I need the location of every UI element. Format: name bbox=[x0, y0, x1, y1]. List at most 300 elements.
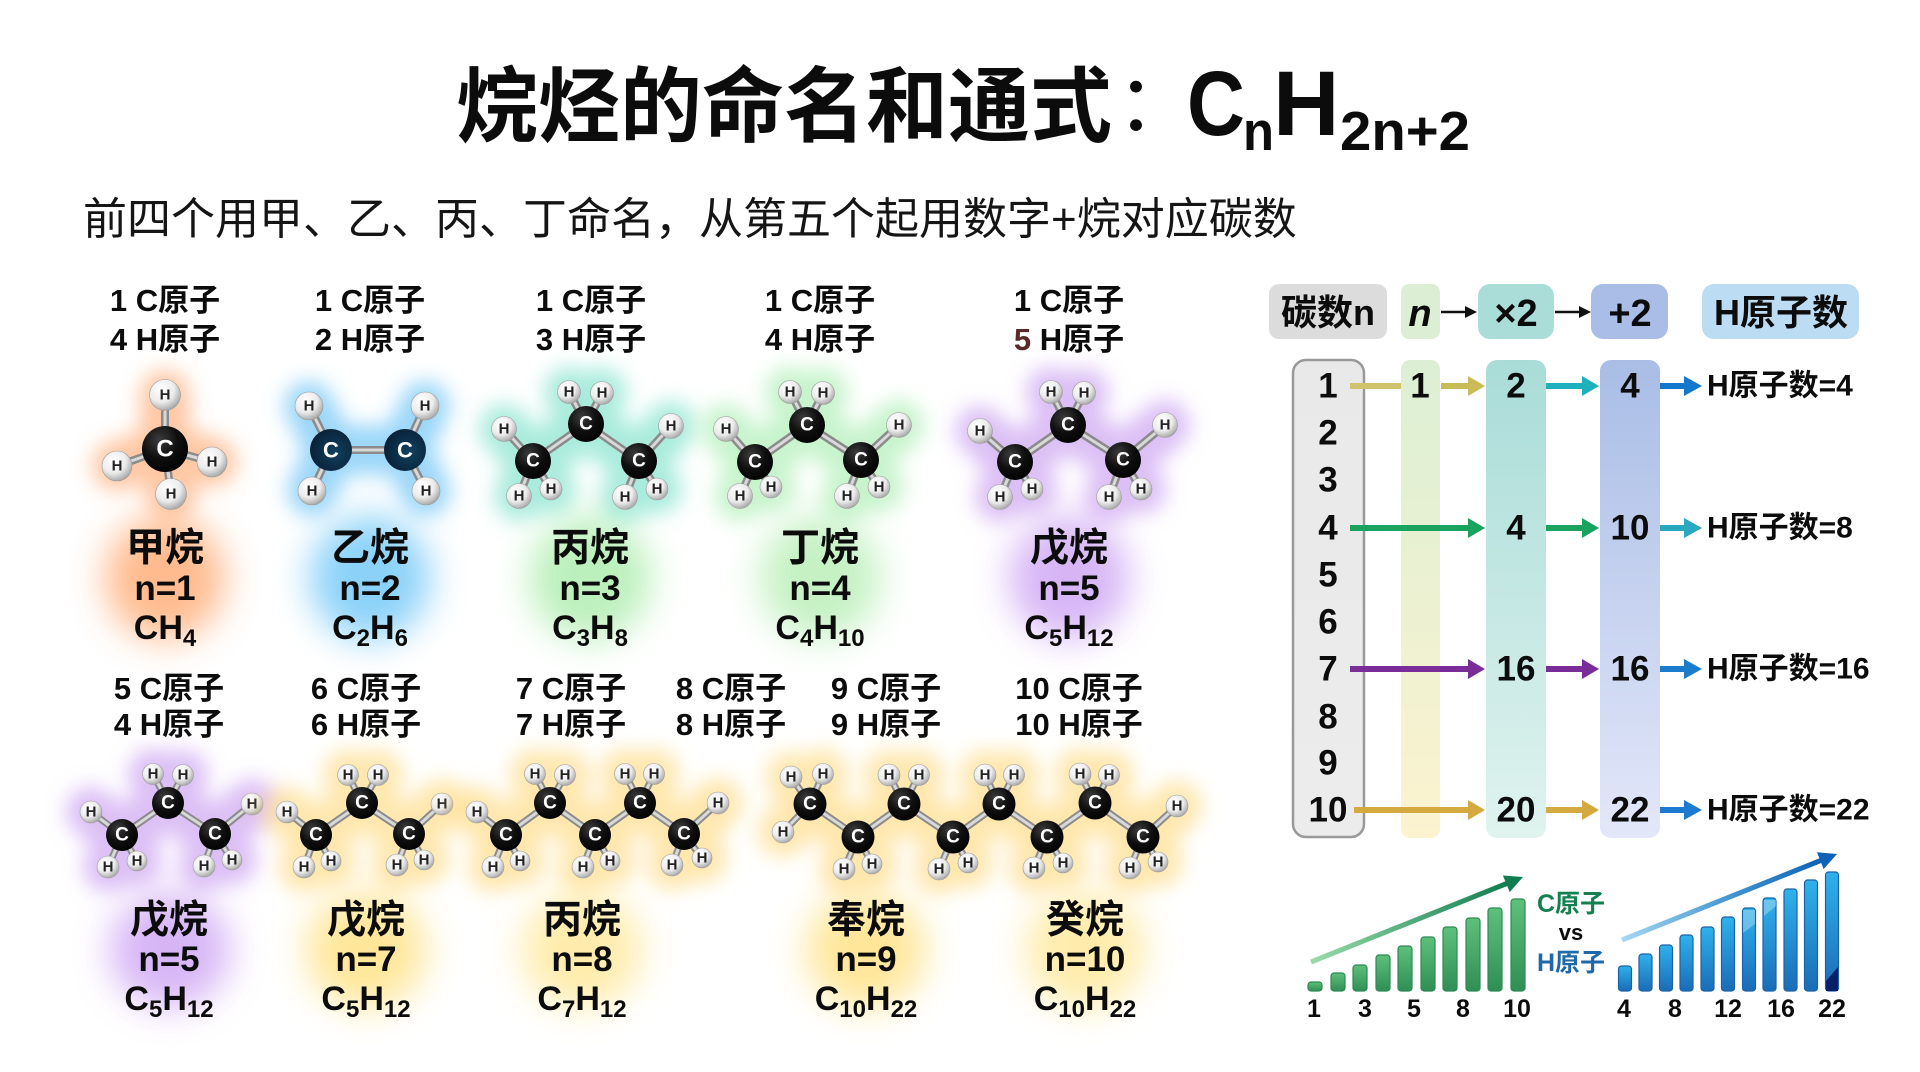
name and formula: n=7 bbox=[321, 899, 411, 1023]
molecule: 戊烷 n=5: H bbox=[975, 422, 985, 440]
molecule: 丙烷 n=3: H bbox=[499, 420, 509, 438]
axis labels: C: 8 bbox=[1456, 995, 1470, 1023]
molecule: 乙烷 bbox=[295, 392, 440, 505]
legend: C vs H: C原子 bbox=[1537, 890, 1605, 918]
name and formula: 丙烷 n=3: n=3 bbox=[559, 569, 621, 608]
name and formula: 戊烷 n=5: n=5 bbox=[1038, 569, 1100, 608]
panel: 戊烷 (n=5) bbox=[968, 283, 1178, 652]
name and formula: 丙烷 n=3: C bbox=[552, 609, 577, 647]
molecule: 丁烷: H bbox=[721, 420, 731, 438]
name and formula: row 2 n=5 bbox=[124, 899, 214, 1023]
atom counts: 丁烷: 1 C原子 bbox=[765, 283, 875, 318]
atom counts: 丁烷 bbox=[765, 283, 875, 357]
molecule: n=7: H bbox=[419, 852, 429, 868]
name and formula: row 2 n=5: n=5 bbox=[138, 940, 200, 979]
molecule: 乙烷: H bbox=[420, 398, 430, 414]
atom counts: n=10 bbox=[1015, 671, 1143, 742]
molecule: n=7: C bbox=[355, 792, 369, 814]
panel: 乙烷 bbox=[295, 283, 440, 652]
molecule: long chain: H bbox=[1075, 766, 1085, 782]
molecule: n=8: H bbox=[560, 766, 570, 784]
name and formula: 丙烷 n=3: 8 bbox=[615, 625, 628, 652]
molecule: n=8: C bbox=[499, 824, 513, 846]
atom counts: 丙烷 n=3: 1 C原子 bbox=[536, 283, 646, 318]
panel: 丙烷 (n=8) bbox=[466, 671, 786, 1023]
name and formula: 乙烷: n=2 bbox=[339, 569, 401, 608]
name and formula: 丙烷 n=3: 3 bbox=[577, 625, 590, 652]
molecule: 戊烷 n=5: H bbox=[1027, 480, 1037, 498]
molecule: long chain: H bbox=[1153, 854, 1163, 870]
legend: C vs H bbox=[1537, 890, 1605, 977]
bar corner bbox=[1826, 967, 1838, 991]
column values: +2: 22 bbox=[1611, 790, 1649, 830]
column values: ×2: 4 bbox=[1506, 508, 1526, 548]
molecule: long chain: C bbox=[851, 826, 865, 848]
molecule: row 2 n=5: H bbox=[247, 796, 257, 812]
molecule: n=7: H bbox=[437, 796, 447, 812]
name and formula: n=8: 12 bbox=[600, 996, 627, 1023]
molecule: 戊烷 n=5: H bbox=[1046, 384, 1056, 400]
panel: 奉烷 and 癸烷 bbox=[772, 671, 1188, 1023]
header: +2 bbox=[1591, 284, 1668, 339]
molecule: long chain: H bbox=[1104, 766, 1114, 784]
molecule: long chain: C bbox=[992, 794, 1006, 814]
name and formula: 甲烷: 甲烷 bbox=[126, 527, 204, 570]
molecule: 丙烷 n=3: H bbox=[666, 418, 676, 434]
atom counts: 甲烷: 4 H原子 bbox=[110, 322, 220, 357]
header: n: n bbox=[1408, 293, 1432, 335]
molecule: 丙烷 n=3: C bbox=[632, 450, 646, 472]
molecule: 丁烷: C bbox=[800, 414, 814, 436]
name and formula: 戊烷 n=5: 戊烷 bbox=[1030, 527, 1108, 570]
atom counts: 丙烷 n=3: 3 H原子 bbox=[536, 322, 646, 357]
name and formula: 癸烷: 10 bbox=[1058, 996, 1085, 1023]
molecule: long chain: H bbox=[1009, 766, 1019, 784]
molecule: n=7: H bbox=[373, 766, 383, 784]
molecule: row 2 n=5: C bbox=[161, 792, 175, 814]
name and formula: 癸烷: 癸烷 bbox=[1046, 899, 1124, 942]
name and formula: 甲烷: 4 bbox=[183, 625, 197, 652]
molecule: 丙烷 n=3: H bbox=[514, 488, 524, 504]
arrow row: n=10 bbox=[1354, 800, 1702, 820]
panel: 戊烷 (row 2, n=5) bbox=[80, 671, 263, 1023]
name and formula: 丁烷 bbox=[775, 527, 865, 652]
molecule: n=7: C bbox=[402, 824, 416, 844]
column: 碳数: 10 bbox=[1309, 790, 1347, 830]
molecule: 丁烷 bbox=[714, 380, 912, 508]
axis labels: H: 22 bbox=[1818, 995, 1846, 1023]
name and formula: 戊烷 n=5: 12 bbox=[1087, 625, 1114, 652]
name and formula: 乙烷 bbox=[331, 527, 409, 652]
header: H原子数: H原子数 bbox=[1714, 292, 1848, 333]
molecule: long chain: C bbox=[897, 794, 911, 814]
molecule: 丁烷: H bbox=[766, 478, 776, 496]
name and formula: 癸烷: 22 bbox=[1110, 996, 1136, 1023]
column: 碳数: 2 bbox=[1318, 414, 1338, 452]
name and formula: 癸烷: C bbox=[1034, 980, 1058, 1018]
molecule: long chain: C bbox=[1040, 826, 1054, 848]
column values: +2: 16 bbox=[1611, 650, 1649, 688]
subtitle: 前四个用甲、乙、丙、丁命名，从第五个起用数字+烷对应碳数 bbox=[83, 195, 1297, 244]
molecule: 丙烷 n=3: C bbox=[526, 450, 540, 472]
bar chart: C原子 bbox=[1307, 876, 1531, 1023]
molecule: n=7: H bbox=[282, 804, 292, 820]
molecule: long chain: H bbox=[1058, 854, 1068, 872]
header: 碳数n: 碳数n bbox=[1281, 292, 1375, 333]
molecule: long chain: H bbox=[818, 766, 828, 782]
results: H原子数: H原子数=16 bbox=[1707, 652, 1870, 686]
panel: 丁烷 bbox=[714, 283, 912, 652]
molecule: long chain: H bbox=[786, 768, 796, 786]
name and formula: 奉烷: 奉烷 bbox=[827, 899, 905, 942]
atom counts: n=9: 9 H原子 bbox=[831, 707, 941, 742]
molecule: n=7 bbox=[276, 764, 453, 878]
title: H bbox=[1273, 53, 1339, 155]
title: n bbox=[1243, 100, 1274, 162]
title: 2n+2 bbox=[1340, 100, 1470, 162]
column: 碳数: 5 bbox=[1318, 556, 1338, 594]
name and formula: 乙烷: 2 bbox=[357, 625, 370, 652]
name and formula: 癸烷 bbox=[1034, 899, 1136, 1023]
atom counts: n=9: 9 C原子 bbox=[831, 671, 941, 706]
column values: +2: 4 bbox=[1620, 366, 1640, 406]
molecule: long chain: H bbox=[884, 766, 894, 784]
axis labels: H bbox=[1617, 995, 1846, 1023]
molecule: 丙烷 n=3: H bbox=[597, 384, 607, 402]
molecule: long chain: H bbox=[1172, 798, 1182, 814]
molecule: 戊烷 n=5: H bbox=[1079, 384, 1089, 402]
molecule: 乙烷: H bbox=[304, 398, 314, 414]
column values: ×2: 20 bbox=[1497, 790, 1535, 830]
molecule: 丙烷 n=3: H bbox=[546, 480, 556, 498]
column: ×2 bbox=[1486, 360, 1546, 838]
molecule: n=8: C bbox=[588, 824, 602, 846]
molecule: long chain: H bbox=[839, 860, 849, 878]
axis labels: C bbox=[1307, 995, 1531, 1023]
molecule: 戊烷 n=5: H bbox=[1160, 416, 1170, 434]
column values: +2 bbox=[1611, 366, 1649, 830]
results: H原子数 bbox=[1707, 370, 1870, 826]
molecule: row 2 n=5 bbox=[80, 764, 263, 878]
atom counts: n=7/8 headers: 8 H原子 bbox=[676, 707, 786, 742]
name and formula: n=8 bbox=[537, 899, 627, 1023]
name and formula: 丁烷: 10 bbox=[838, 625, 865, 652]
molecule: n=8: C bbox=[543, 792, 557, 814]
bar chart: H原子 bbox=[1617, 852, 1846, 1023]
name and formula: 甲烷: n=1 bbox=[134, 569, 196, 608]
legend: C vs H: H原子 bbox=[1537, 949, 1605, 977]
arrow row: n=7 bbox=[1350, 659, 1702, 679]
atom counts: row 2 n=5 bbox=[114, 671, 224, 742]
molecule: row 2 n=5: H bbox=[178, 766, 188, 784]
name and formula: 癸烷: H bbox=[1085, 980, 1110, 1018]
molecule: n=8: H bbox=[515, 852, 525, 870]
name and formula: 乙烷: 6 bbox=[395, 625, 408, 652]
arrow: n to ×2 bbox=[1441, 306, 1477, 318]
name and formula: 戊烷 n=5: 5 bbox=[1049, 625, 1062, 652]
name and formula: n=7: 12 bbox=[384, 996, 411, 1023]
atom counts: 戊烷 n=5: 1 C原子 bbox=[1014, 283, 1124, 318]
atom counts: n=7/8 headers bbox=[516, 671, 786, 742]
name and formula: n=7: n=7 bbox=[335, 940, 397, 979]
title: 烷烃的命名和通式 bbox=[456, 62, 1112, 153]
molecule: n=8: C bbox=[677, 824, 691, 844]
molecule: long chain bbox=[772, 763, 1188, 880]
name and formula: n=7: C bbox=[321, 980, 346, 1018]
molecule: row 2 n=5: C bbox=[115, 824, 129, 846]
molecule: n=8: H bbox=[649, 766, 659, 782]
molecule: long chain: H bbox=[1029, 860, 1039, 876]
axis labels: C: 5 bbox=[1407, 995, 1421, 1023]
name and formula: n=7: 戊烷 bbox=[327, 899, 405, 942]
name and formula: 奉烷: 10 bbox=[839, 996, 866, 1023]
name and formula: n=8: H bbox=[575, 980, 600, 1018]
panel: 甲烷 bbox=[102, 283, 227, 652]
name and formula: 戊烷 n=5: C bbox=[1024, 609, 1049, 647]
axis labels: H: 4 bbox=[1617, 995, 1631, 1023]
arrow row: n=1 bbox=[1350, 376, 1702, 396]
molecule: n=8: H bbox=[697, 850, 707, 866]
name and formula: n=8: 7 bbox=[562, 996, 575, 1023]
title: C bbox=[1187, 53, 1245, 155]
axis labels: H: 8 bbox=[1668, 995, 1682, 1023]
molecule: 戊烷 n=5: H bbox=[1104, 488, 1114, 506]
results: H原子数: H原子数=8 bbox=[1707, 512, 1853, 544]
molecule: 丙烷 n=3: H bbox=[620, 488, 630, 506]
results: H原子数: H原子数=4 bbox=[1707, 370, 1853, 402]
name and formula: 丁烷: H bbox=[813, 609, 838, 647]
molecule: long chain: H bbox=[778, 824, 788, 840]
name and formula: n=8: n=8 bbox=[551, 940, 613, 979]
name and formula: 戊烷 n=5: H bbox=[1062, 609, 1087, 647]
atom counts: row 2 n=5: 5 C原子 bbox=[114, 671, 224, 706]
axis labels: H: 12 bbox=[1714, 995, 1742, 1023]
axis labels: C: 10 bbox=[1503, 995, 1531, 1023]
panel: 戊烷 (n=7) bbox=[276, 671, 453, 1023]
molecule: long chain: C bbox=[946, 826, 960, 848]
name and formula: n=8: 丙烷 bbox=[543, 899, 621, 942]
axis labels: H: 16 bbox=[1767, 995, 1795, 1023]
column: 碳数: 8 bbox=[1318, 698, 1338, 736]
molecule: 丙烷 n=3 bbox=[492, 380, 684, 510]
name and formula: 奉烷: H bbox=[866, 980, 891, 1018]
name and formula: row 2 n=5: 5 bbox=[149, 996, 162, 1023]
name and formula: 丙烷 n=3: H bbox=[590, 609, 615, 647]
column: 碳数: 6 bbox=[1318, 602, 1338, 642]
molecule: 丁烷: H bbox=[818, 384, 828, 402]
title bbox=[456, 46, 1470, 162]
name and formula: 乙烷: 乙烷 bbox=[331, 527, 409, 570]
header: 碳数n bbox=[1269, 284, 1387, 339]
panel: flow table bbox=[1269, 284, 1870, 838]
column values: ×2: 16 bbox=[1497, 650, 1535, 688]
molecule: row 2 n=5: H bbox=[132, 852, 142, 870]
atom counts: 丁烷: 4 H原子 bbox=[765, 322, 875, 357]
atom counts: 乙烷: 1 C原子 bbox=[315, 283, 425, 318]
molecule: n=7: H bbox=[343, 766, 353, 784]
column: 碳数: 3 bbox=[1318, 460, 1338, 500]
column values: ×2: 2 bbox=[1506, 366, 1526, 406]
name and formula: 乙烷: H bbox=[370, 609, 395, 647]
name and formula: row 2 n=5: 12 bbox=[187, 996, 214, 1023]
molecule: n=8: H bbox=[578, 858, 588, 876]
column values: ×2 bbox=[1497, 366, 1535, 830]
molecule: n=8: H bbox=[667, 856, 677, 874]
molecule: 甲烷: H bbox=[166, 486, 176, 502]
molecule: n=8: H bbox=[472, 804, 482, 820]
molecule: 甲烷: H bbox=[207, 454, 217, 470]
molecule: 甲烷: C bbox=[156, 436, 174, 462]
atom counts: 甲烷 bbox=[110, 283, 220, 357]
name and formula: 奉烷: C bbox=[815, 980, 839, 1018]
atom counts: n=7/8 headers: 8 C原子 bbox=[676, 671, 786, 706]
column: 碳数: 9 bbox=[1318, 744, 1338, 782]
legend: C vs H: vs bbox=[1559, 920, 1583, 945]
atom counts: 丙烷 n=3 bbox=[536, 283, 646, 357]
atom counts: n=7: 6 H原子 bbox=[311, 707, 421, 742]
name and formula: 丙烷 n=3 bbox=[551, 527, 629, 652]
atom counts: n=9 bbox=[831, 671, 941, 742]
name and formula: 癸烷: n=10 bbox=[1045, 940, 1125, 979]
column: +2 bbox=[1600, 360, 1660, 838]
molecule: long chain: H bbox=[980, 766, 990, 784]
molecule: 乙烷: C bbox=[323, 438, 339, 462]
molecule: 丙烷 n=3: C bbox=[579, 414, 593, 434]
atom counts: 甲烷: 1 C原子 bbox=[110, 283, 220, 318]
header: +2: +2 bbox=[1608, 293, 1652, 335]
header: ×2: ×2 bbox=[1494, 293, 1538, 335]
molecule: row 2 n=5: H bbox=[199, 858, 209, 874]
atom counts: n=7 bbox=[311, 671, 421, 742]
molecule: row 2 n=5: H bbox=[103, 858, 113, 876]
molecule: long chain: C bbox=[1088, 792, 1102, 814]
molecule: long chain: H bbox=[934, 860, 944, 878]
name and formula: 奉烷: 22 bbox=[891, 996, 917, 1023]
atom counts: 乙烷 bbox=[315, 283, 425, 357]
name and formula: 丁烷: C bbox=[775, 609, 800, 647]
molecule: n=8 bbox=[466, 764, 729, 878]
bar highlights bbox=[1743, 900, 1776, 933]
molecule: 丙烷 n=3: H bbox=[564, 384, 574, 400]
molecule: 丁烷: H bbox=[894, 416, 904, 434]
panel: 丙烷 (n=3) bbox=[492, 283, 684, 652]
column: 碳数: 1 bbox=[1318, 366, 1338, 406]
molecule: n=8: H bbox=[713, 794, 723, 812]
molecule: 丁烷: H bbox=[874, 478, 884, 496]
atom counts: n=10: 10 C原子 bbox=[1015, 671, 1143, 706]
name and formula: 乙烷: C bbox=[332, 609, 357, 647]
molecule: long chain: H bbox=[914, 766, 924, 784]
header: ×2 bbox=[1478, 284, 1554, 339]
molecule: 甲烷: H bbox=[160, 386, 170, 404]
molecule: row 2 n=5: H bbox=[86, 804, 96, 820]
axis labels: C: 1 bbox=[1307, 995, 1321, 1023]
molecule: 甲烷: H bbox=[112, 458, 122, 474]
molecule: n=8: H bbox=[488, 858, 498, 876]
molecule: long chain: H bbox=[963, 854, 973, 872]
molecule: 丙烷 n=3: H bbox=[652, 480, 662, 498]
atom counts: n=7: 6 C原子 bbox=[311, 671, 421, 706]
molecule: 丁烷: H bbox=[785, 384, 795, 400]
molecule: long chain: C bbox=[803, 794, 817, 814]
atom counts: 乙烷: 2 H原子 bbox=[315, 322, 425, 357]
molecule: long chain: H bbox=[1125, 860, 1135, 876]
name and formula: n=7: H bbox=[359, 980, 384, 1018]
molecule: row 2 n=5: C bbox=[208, 824, 222, 844]
molecule: 丁烷: H bbox=[842, 488, 852, 504]
atom counts: n=10: 10 H原子 bbox=[1015, 707, 1143, 742]
molecule: row 2 n=5: H bbox=[148, 766, 158, 782]
column: 碳数: 4 bbox=[1318, 508, 1338, 548]
name and formula: 奉烷 bbox=[815, 899, 917, 1023]
molecule: 丁烷: C bbox=[854, 450, 868, 470]
molecule: row 2 n=5: H bbox=[227, 852, 237, 868]
molecule: 乙烷: C bbox=[397, 438, 413, 462]
arrow: C trend bbox=[1311, 876, 1523, 962]
molecule: 乙烷: H bbox=[307, 482, 317, 500]
column: 碳数: 7 bbox=[1318, 650, 1338, 688]
name and formula: 甲烷: CH bbox=[134, 609, 183, 647]
molecule: long chain: C bbox=[1136, 826, 1150, 848]
molecule: n=8: C bbox=[633, 792, 647, 814]
atom counts: n=7/8 headers: 7 H原子 bbox=[516, 707, 626, 742]
molecule: n=7: H bbox=[326, 852, 336, 870]
header: H原子数 bbox=[1702, 284, 1859, 339]
name and formula: 丁烷: 丁烷 bbox=[781, 527, 859, 570]
atom counts: 戊烷 n=5: 5 H原子 bbox=[1014, 322, 1124, 357]
arrow: H trend bbox=[1622, 852, 1837, 940]
molecule: 戊烷 n=5: H bbox=[1136, 480, 1146, 498]
name and formula: n=8: C bbox=[537, 980, 562, 1018]
column: n bbox=[1401, 360, 1440, 838]
molecule: 戊烷 n=5: C bbox=[1061, 414, 1075, 436]
name and formula: 丁烷: 4 bbox=[800, 625, 814, 652]
molecule: n=8: H bbox=[620, 766, 630, 782]
molecule: n=7: H bbox=[392, 856, 402, 874]
molecule: long chain: H bbox=[867, 856, 877, 872]
name and formula: 戊烷 n=5 bbox=[1024, 527, 1114, 652]
name and formula: 丁烷: n=4 bbox=[789, 569, 851, 608]
name and formula: 甲烷 bbox=[126, 527, 204, 652]
title: ： bbox=[1097, 46, 1175, 158]
column values: +2: 10 bbox=[1611, 508, 1649, 548]
axis labels: C: 3 bbox=[1358, 995, 1372, 1023]
molecule: n=7: H bbox=[299, 858, 309, 876]
arrow row: n=4 bbox=[1350, 518, 1702, 538]
name and formula: 丙烷 n=3: 丙烷 bbox=[551, 527, 629, 570]
atom counts: 戊烷 n=5 bbox=[1014, 283, 1124, 357]
molecule: n=8: H bbox=[530, 766, 540, 782]
molecule: 甲烷 bbox=[102, 380, 227, 510]
molecule: 乙烷: H bbox=[421, 482, 431, 500]
molecule: 戊烷 n=5: C bbox=[1008, 452, 1022, 472]
molecule: n=7: C bbox=[309, 824, 323, 846]
column: 碳数 bbox=[1293, 360, 1364, 837]
molecule: 丁烷: H bbox=[735, 488, 745, 504]
name and formula: 奉烷: n=9 bbox=[835, 940, 897, 979]
name and formula: row 2 n=5: H bbox=[162, 980, 187, 1018]
molecule: 戊烷 n=5 bbox=[968, 380, 1178, 510]
arrow: ×2 to +2 bbox=[1555, 306, 1591, 318]
name and formula: row 2 n=5: 戊烷 bbox=[130, 899, 208, 942]
molecule: 戊烷 n=5: H bbox=[995, 488, 1005, 506]
header: n bbox=[1401, 284, 1440, 339]
name and formula: n=7: 5 bbox=[346, 996, 359, 1023]
atom counts: n=7/8 headers: 7 C原子 bbox=[516, 671, 626, 706]
molecule: n=8: H bbox=[605, 852, 615, 870]
results: H原子数: H原子数=22 bbox=[1707, 794, 1870, 826]
molecule: 戊烷 n=5: C bbox=[1116, 450, 1130, 470]
